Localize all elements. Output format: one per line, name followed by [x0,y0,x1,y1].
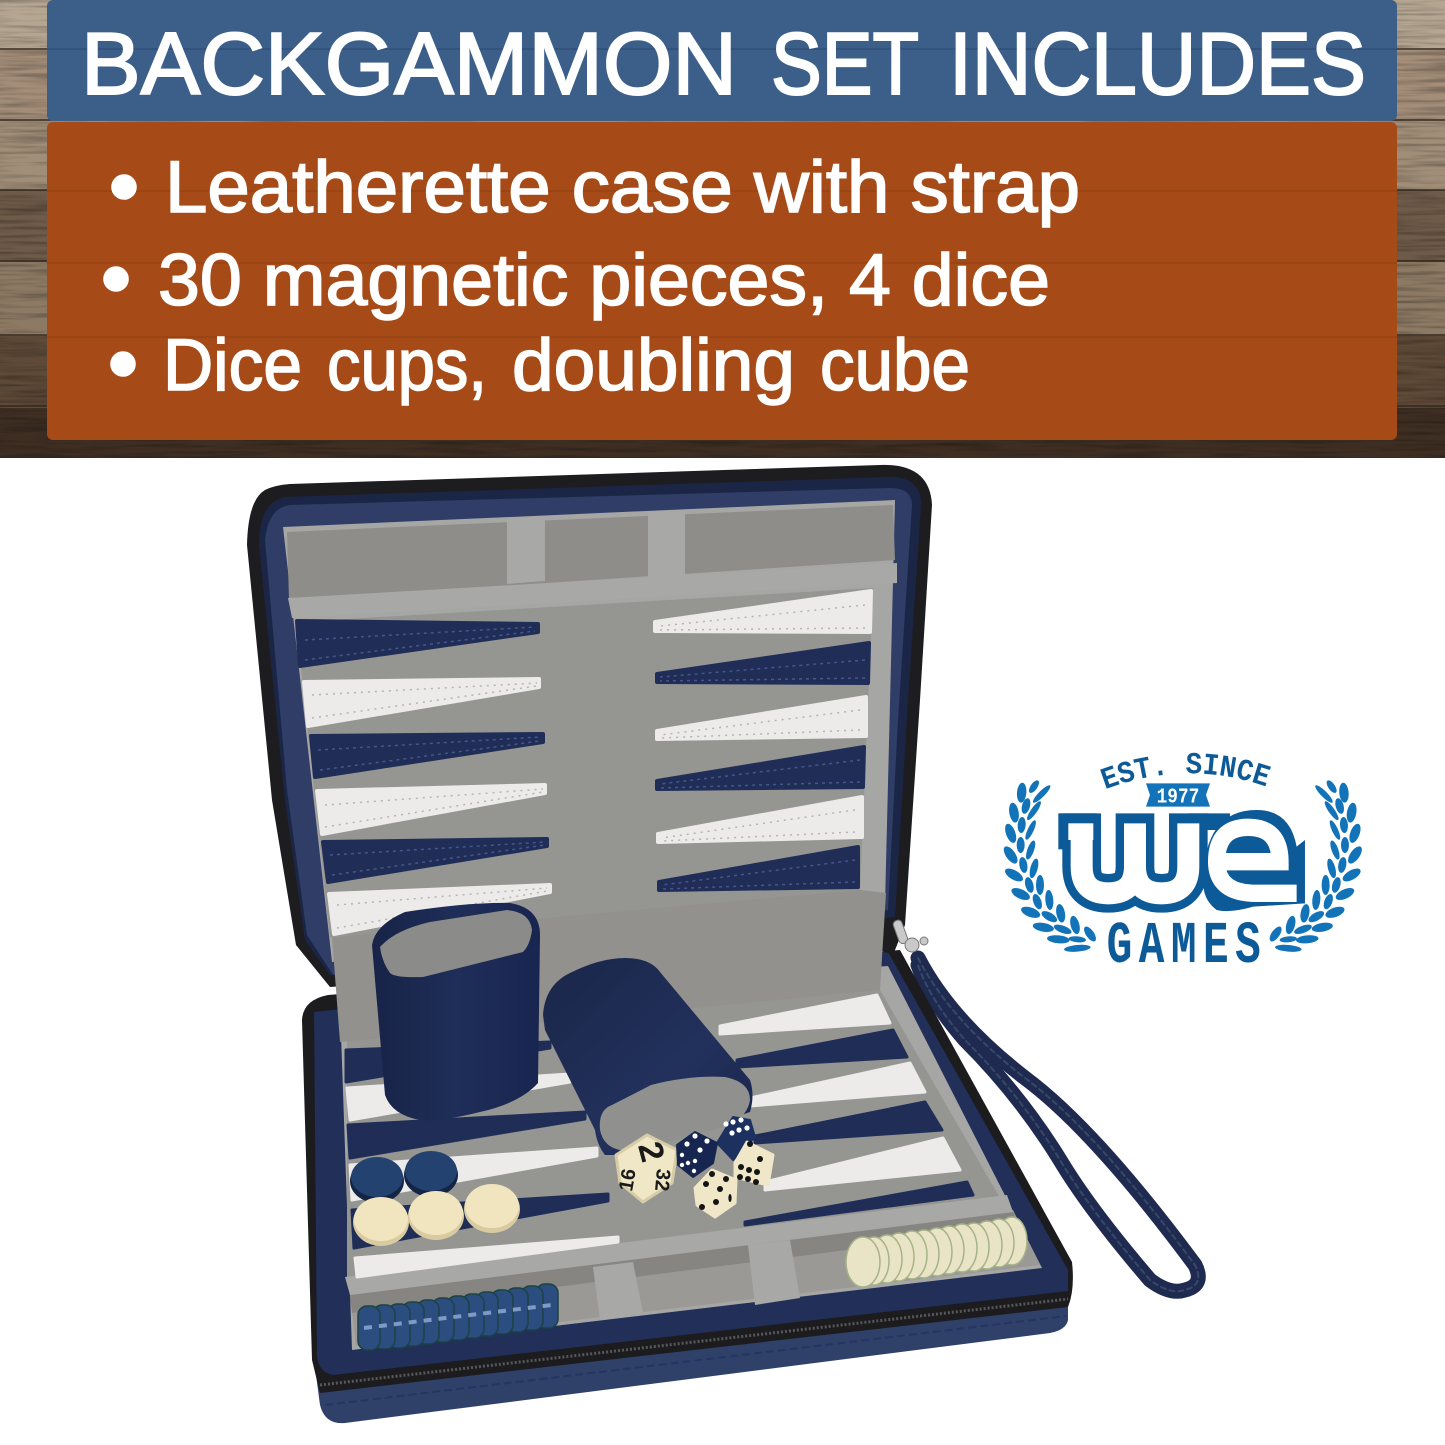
case bottom half [302,950,1073,1423]
games wordmark: GAMES [1107,913,1261,980]
tray ledge [345,1195,1013,1295]
1977 ribbon: 1977 [1157,786,1199,810]
board points on lid [297,591,871,934]
zipper [302,950,1073,1393]
bullet: dice cups: cube [820,325,970,406]
point stitching [305,627,865,889]
navy die [677,1132,717,1177]
board points on bottom half [346,995,973,1277]
compartment divider [593,1262,643,1320]
lid felt tray [283,500,895,962]
panel: included items list [47,122,1397,440]
title text: INCLUDES [949,14,1366,113]
stack of cream checkers [846,1217,1027,1287]
bullet: dice cups: doubling [512,325,795,406]
bullet: dice cups: cups, [327,325,487,406]
case lid [247,465,932,1042]
doubling cube: 32 [650,1168,674,1192]
compartment floor [350,1210,1040,1346]
doubling cube [615,1135,677,1202]
lid navy rim [265,488,912,975]
wood plank background [0,0,1445,458]
est since arched text [1100,752,1271,789]
product photo: backgammon case [247,465,1198,1423]
navy die [717,1117,755,1160]
upright dice cup [372,903,540,1120]
WE lettermark [1058,810,1305,911]
cream checkers [353,1184,520,1246]
compartment divider [648,510,685,578]
laurel wreath left [1001,779,1098,953]
title text: BACKGAMMON [81,14,737,113]
navy checkers [350,1151,458,1203]
est since arched text: EST. SINCE [1100,752,1271,789]
stack of navy checkers [358,1284,558,1350]
bullet: dice cups [111,325,970,406]
compartment divider [507,517,545,584]
lid zipper edge [247,465,932,987]
white point stitching [312,605,865,928]
title text [81,14,1366,113]
compartment ledge [288,563,897,618]
compartment divider [748,1240,800,1305]
bullet: leatherette case: Leatherette case with strap [165,147,1080,228]
storage compartment [287,505,895,600]
zipper pull clasp [892,919,928,952]
navy rim [314,952,1068,1375]
bullet: magnetic pieces: 30 magnetic pieces, 4 dice [158,240,1050,321]
doubling cube: 16 [615,1167,641,1193]
felt tray [340,966,1042,1350]
wrist strap [918,958,1198,1291]
bullet: dice cups: Dice [163,325,302,406]
cream die [695,1170,736,1217]
board surface [347,990,1000,1280]
hinge band [332,890,886,1042]
doubling cube: 2 [630,1138,672,1166]
cream die [735,1141,773,1185]
front leather side [316,1290,1068,1423]
title text: SET [771,14,919,113]
logo: WE Games [1004,752,1362,980]
laurel wreath right [1267,779,1365,953]
tipped dice cup [543,958,752,1155]
title banner [47,0,1397,121]
board surface [296,588,873,937]
